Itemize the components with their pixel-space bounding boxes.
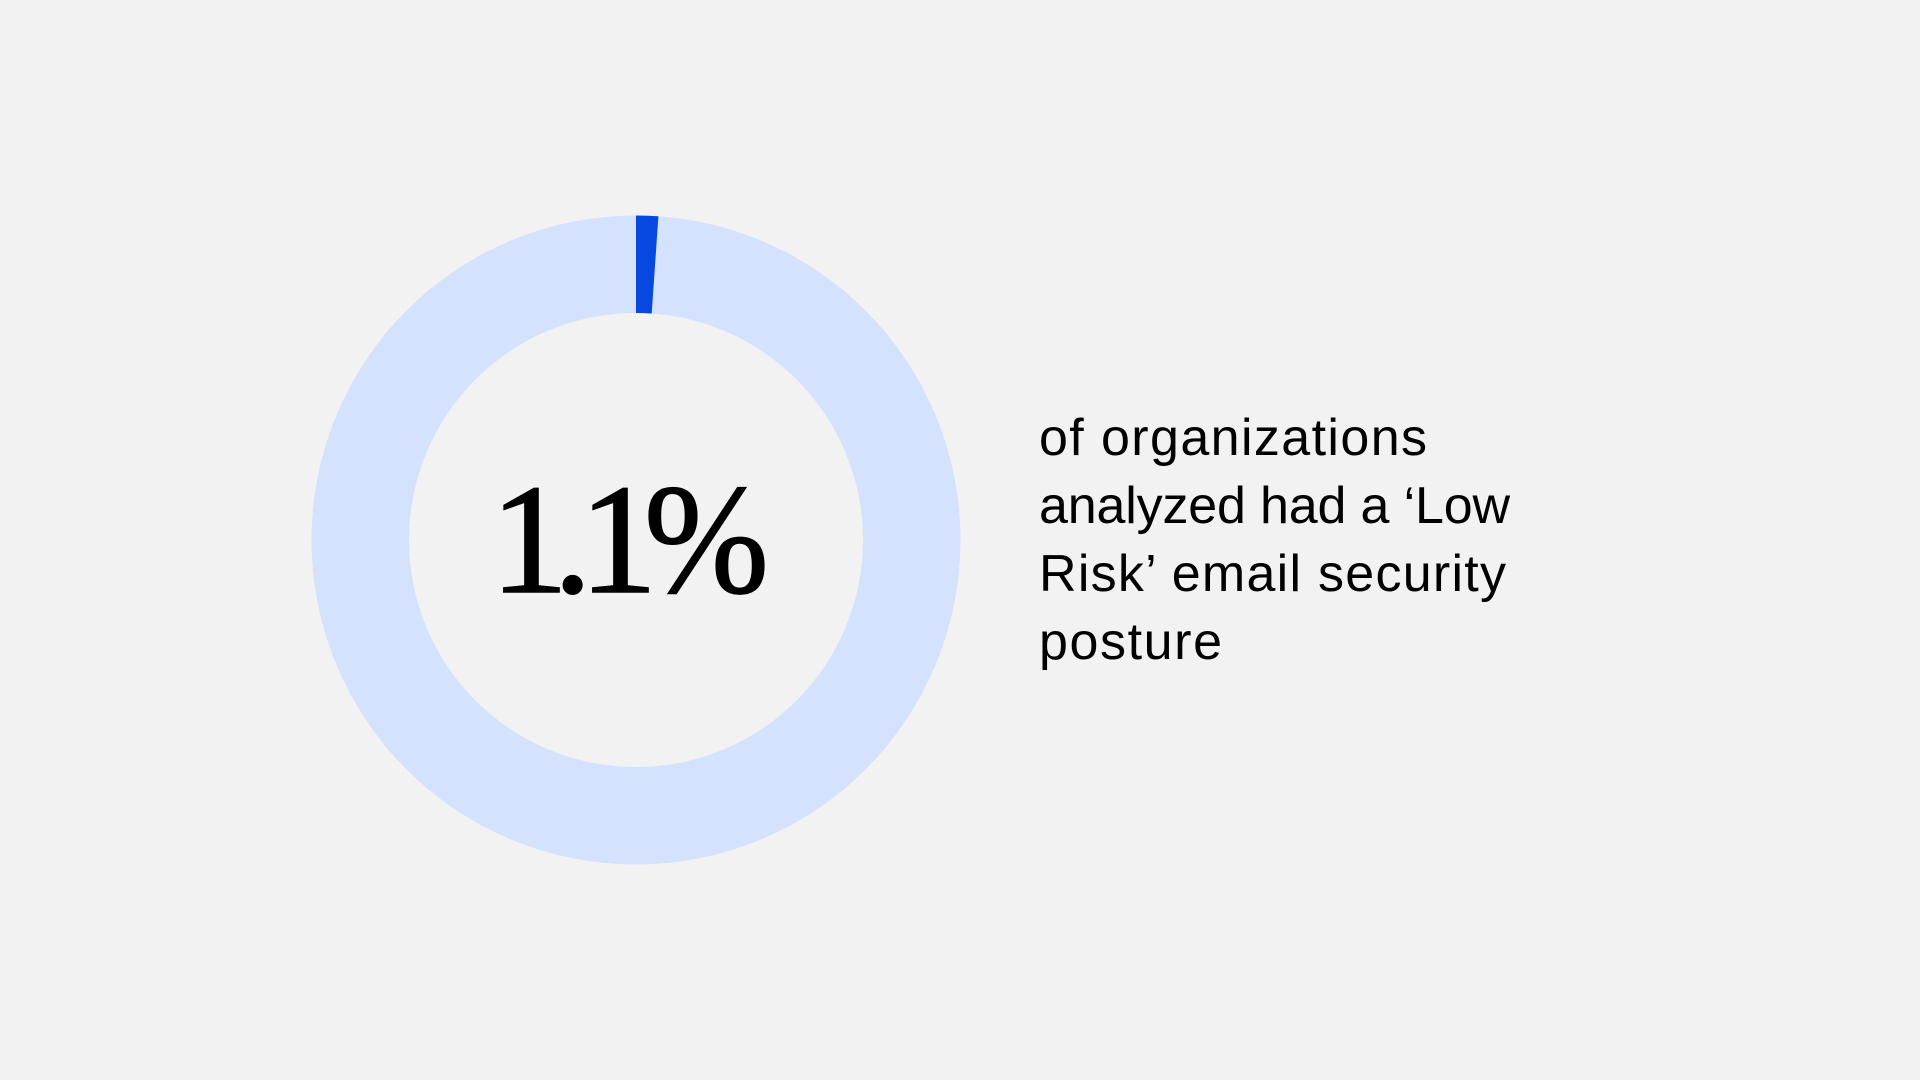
big number: 1.1%: % (644, 452, 769, 626)
donut chart (311, 216, 960, 864)
description text (1039, 409, 1510, 671)
donut track: remaining share (311, 216, 960, 864)
description text: of organizations (1039, 409, 1427, 467)
donut segment: 1.1% (636, 216, 658, 314)
description text: posture (1039, 613, 1222, 671)
big number: 1.1%: . (553, 452, 592, 626)
big number: 1.1%: 1 (490, 452, 568, 626)
description text: Risk’ email security (1039, 545, 1506, 603)
big number: 1.1%: 1 (579, 452, 658, 626)
description text: analyzed had a ‘Low (1039, 477, 1510, 535)
